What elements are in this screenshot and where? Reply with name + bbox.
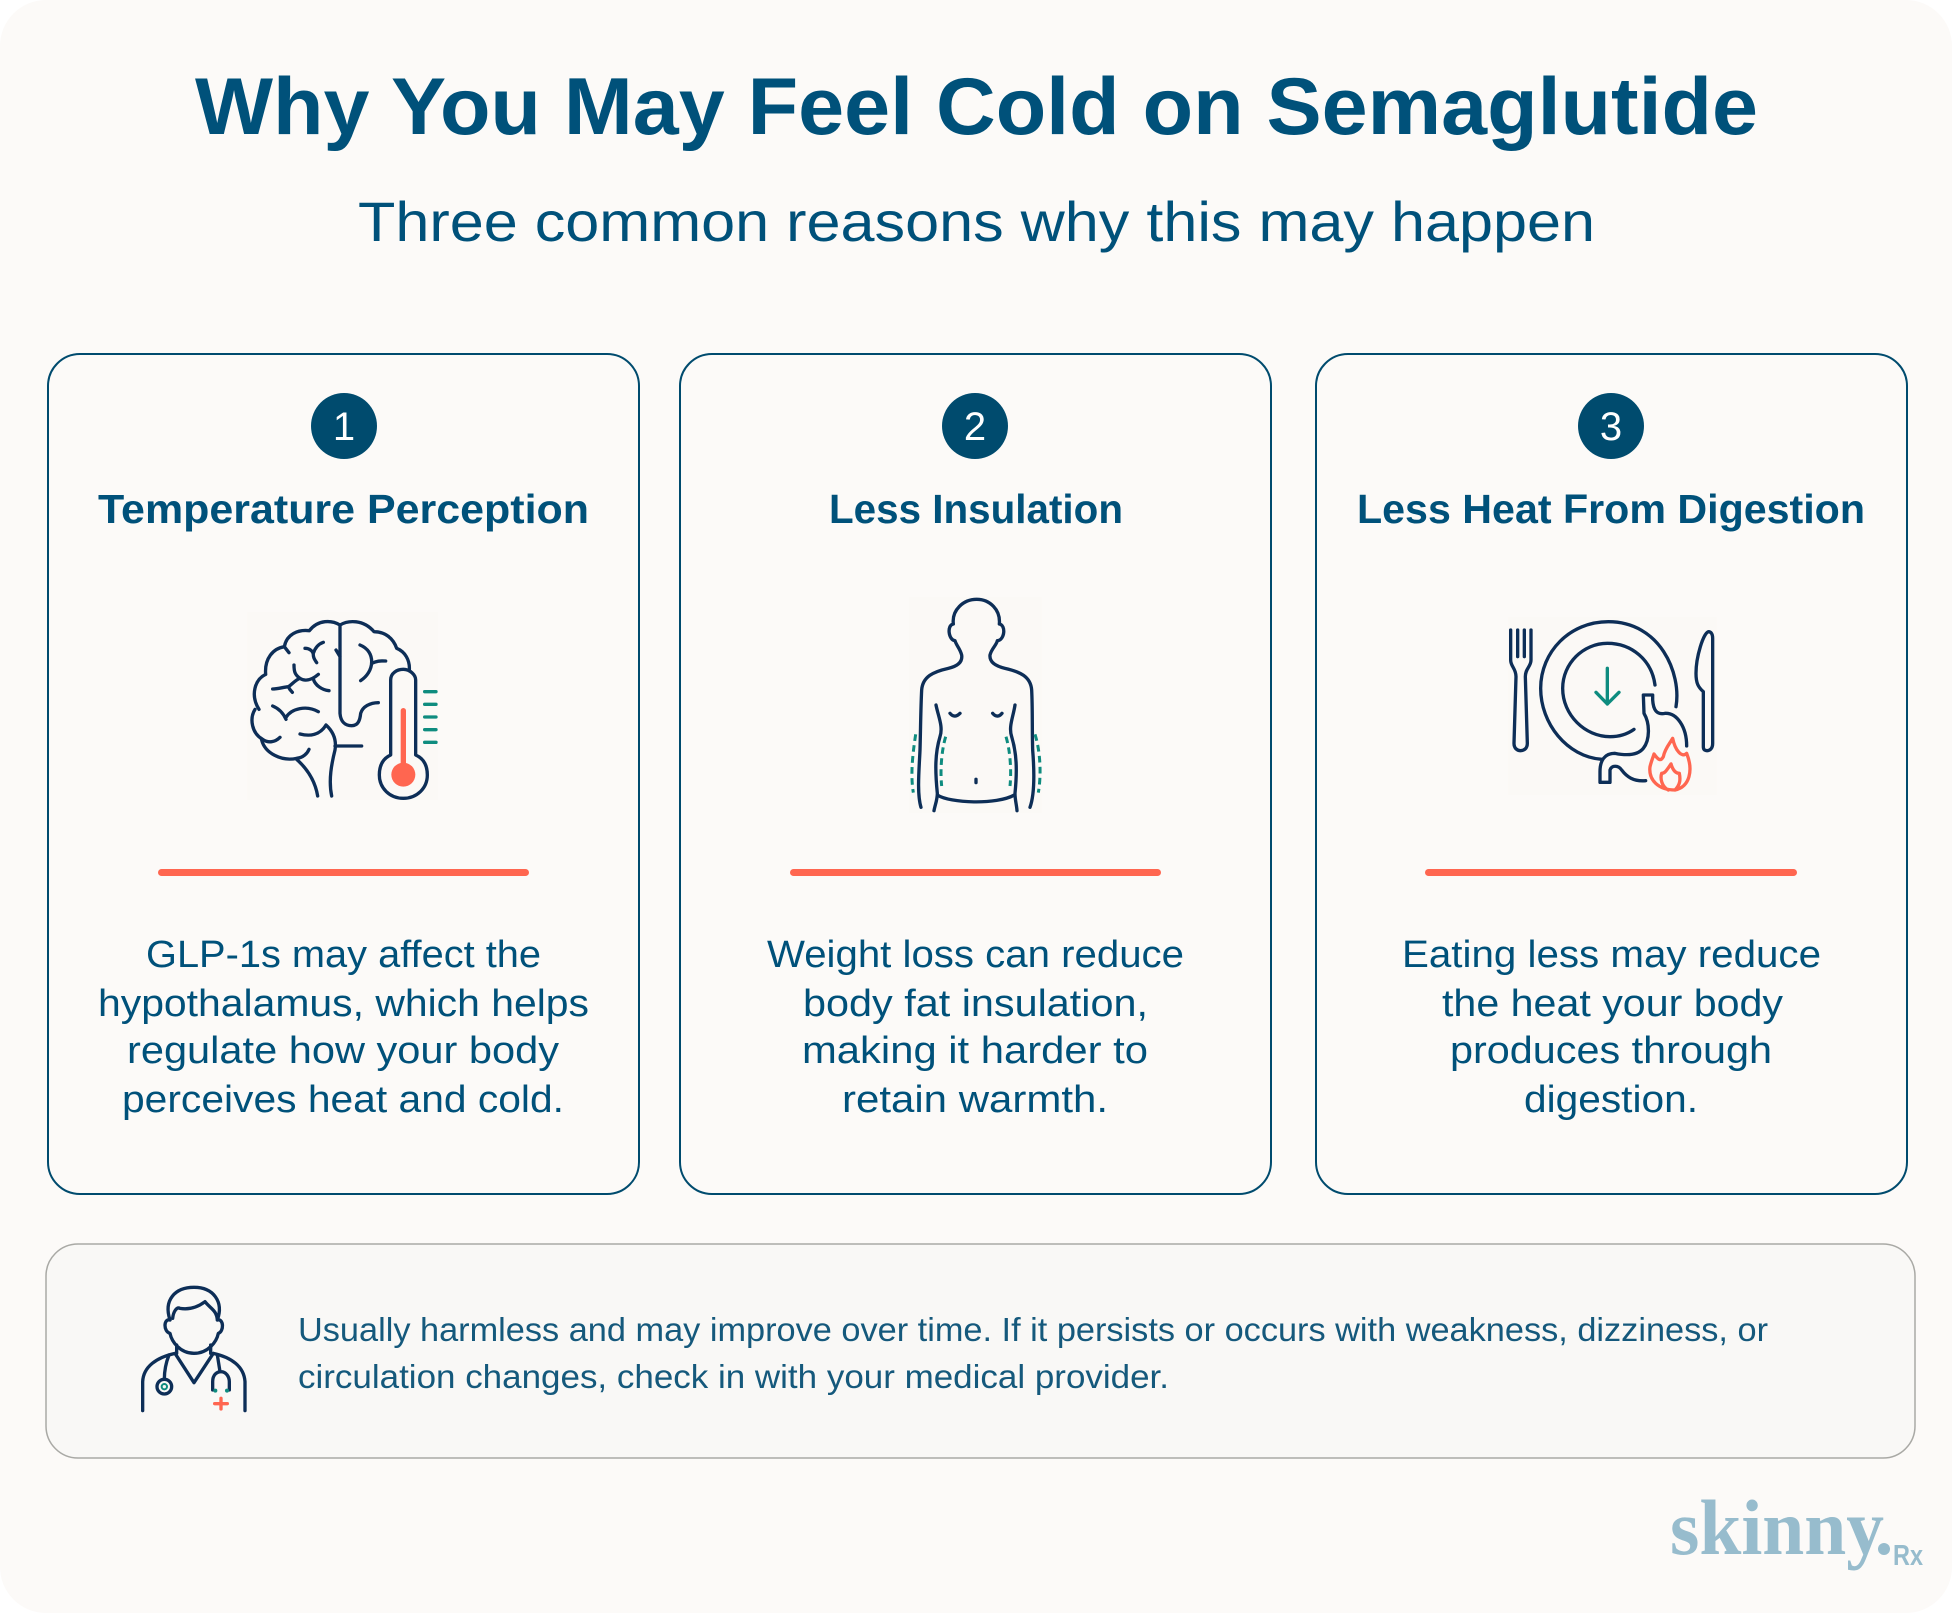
card frame 2 (680, 354, 1271, 1194)
divider 1 (158, 869, 529, 876)
divider 2 (790, 869, 1161, 876)
description 1: perceives heat and cold. (122, 1079, 564, 1121)
description 2: making it harder to (802, 1030, 1148, 1072)
number badge 1: 1 (333, 405, 355, 449)
divider 3 (1425, 869, 1797, 876)
heading: less insulation: Less Insulation (829, 486, 1123, 532)
panel: temperature perception (48, 354, 639, 1194)
heading: less heat from digestion: Less Heat From Digestion (1357, 486, 1865, 532)
description 1: hypothalamus, which helps (98, 983, 589, 1025)
icon: plate, stomach and flame (1508, 617, 1717, 795)
logo: skinny rx: Rx (1893, 1540, 1923, 1572)
description 3 (1402, 934, 1821, 1121)
heading: temperature perception: Temperature Perception (98, 486, 589, 532)
description 2: Weight loss can reduce (767, 934, 1184, 976)
note text (298, 1311, 1768, 1395)
note text: circulation changes, check in with your medical provider. (298, 1358, 1169, 1395)
number badge 2: 2 (964, 405, 986, 449)
panel: less heat from digestion (1316, 354, 1907, 1194)
note frame (46, 1244, 1915, 1458)
description 3: produces through (1450, 1030, 1772, 1072)
description 3: the heat your body (1442, 983, 1783, 1025)
card frame 3 (1316, 354, 1907, 1194)
description 1: regulate how your body (127, 1030, 559, 1072)
panel: less insulation (680, 354, 1271, 1194)
logo: skinny rx: skinny (1670, 1484, 1884, 1571)
icon: body outline (909, 597, 1042, 813)
description 3: Eating less may reduce (1402, 934, 1821, 976)
description 3: digestion. (1524, 1079, 1698, 1121)
panel: medical note (46, 1244, 1915, 1458)
note text: Usually harmless and may improve over time. If it persists or occurs with weakness, dizziness, or (298, 1311, 1768, 1348)
title: Why You May Feel Cold on Semaglutide (195, 62, 1758, 152)
description 1 (98, 934, 589, 1121)
number badge 2 (942, 393, 1008, 459)
description 2: retain warmth. (842, 1079, 1108, 1121)
card frame 1 (48, 354, 639, 1194)
icon: doctor (143, 1287, 245, 1411)
number badge 3: 3 (1600, 405, 1622, 449)
number badge 3 (1578, 393, 1644, 459)
icon: brain and thermometer (247, 612, 438, 800)
subtitle: Three common reasons why this may happen (358, 190, 1595, 253)
description 2 (767, 934, 1184, 1121)
number badge 1 (311, 393, 377, 459)
description 1: GLP-1s may affect the (146, 934, 541, 976)
description 2: body fat insulation, (803, 983, 1148, 1025)
